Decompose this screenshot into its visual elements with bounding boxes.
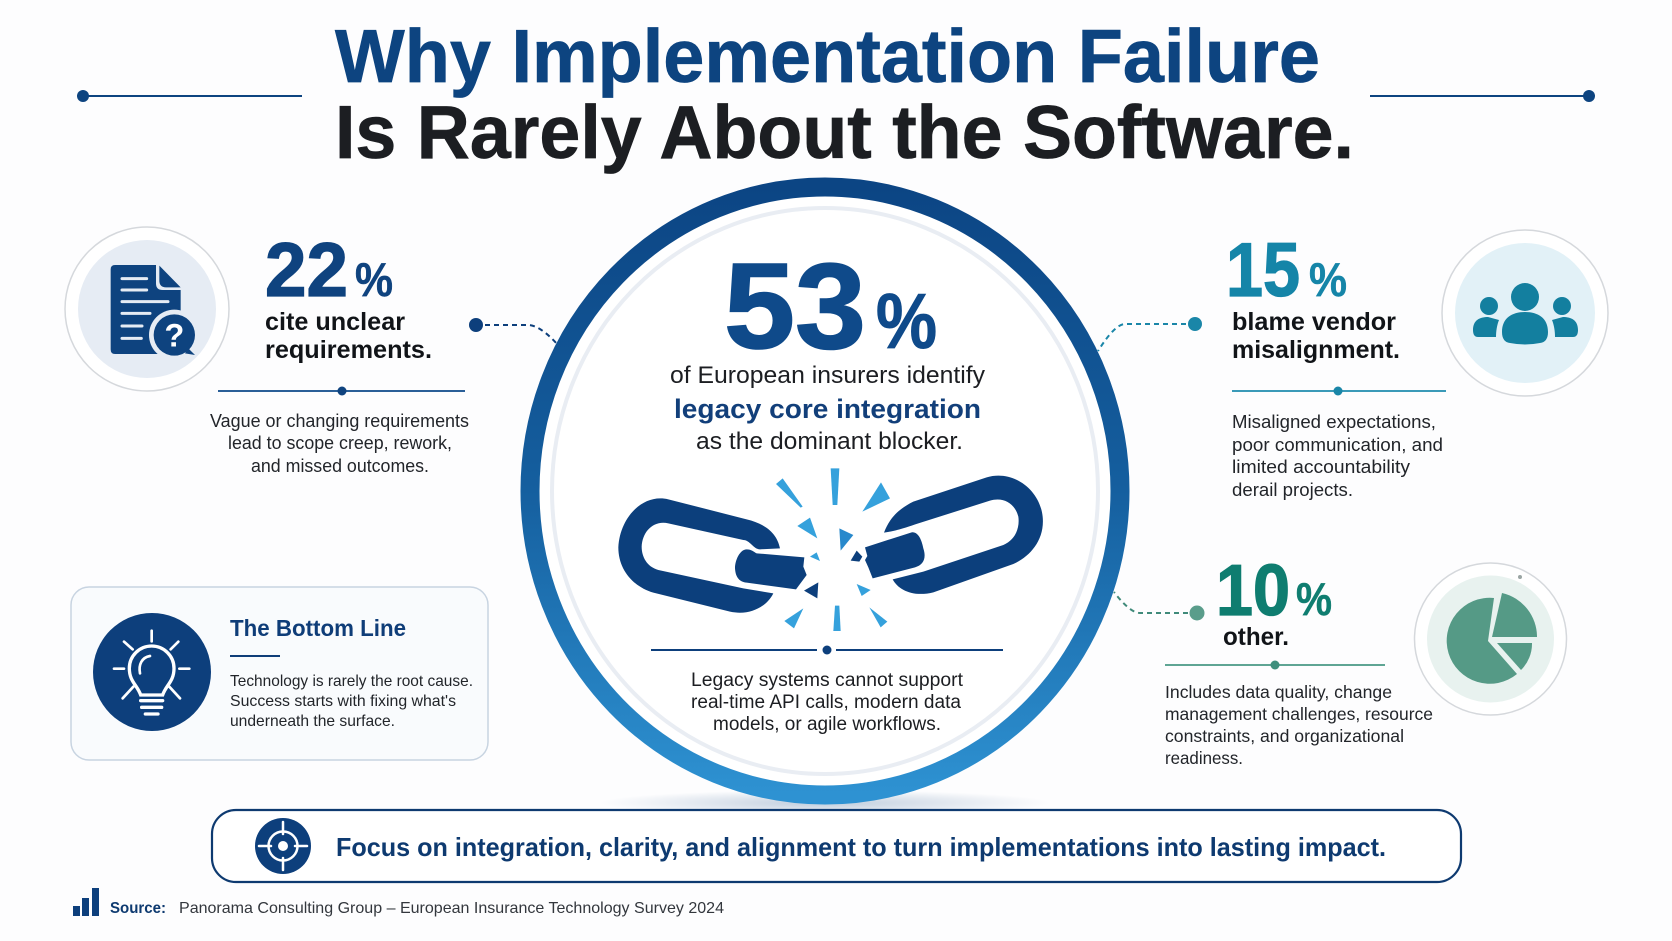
bottom line text: Success starts with fixing what's [230, 693, 456, 710]
connector: 10% [1114, 592, 1204, 620]
connector: 22% [469, 318, 558, 345]
22 percent description: lead to scope creep, rework, [228, 433, 452, 453]
15 percent label: misalignment. [1232, 336, 1400, 364]
22 percent label [265, 308, 432, 364]
icon: people group [1442, 230, 1608, 396]
15 percent figure: % [1309, 253, 1347, 306]
15 percent description: limited accountability [1232, 457, 1410, 477]
bottom line text [230, 673, 473, 730]
title [335, 14, 1354, 174]
icon: lightbulb [93, 613, 211, 731]
central statement: legacy core integration [674, 394, 981, 424]
22 percent figure [265, 228, 393, 313]
panel: 15 percent vendor misalignment [1226, 228, 1608, 500]
panel: 10 percent other [1165, 551, 1566, 768]
15 percent divider [1232, 386, 1446, 396]
icon: document with question mark: ? [164, 317, 184, 354]
banner: focus statement [212, 810, 1461, 882]
bottom line text: Technology is rarely the root cause. [230, 673, 473, 690]
panel: the bottom line [71, 587, 488, 760]
connector: 15% [1098, 317, 1202, 351]
source text: Panorama Consulting Group – European Insurance Technology Survey 2024 [179, 900, 724, 917]
22 percent figure: % [355, 253, 393, 306]
central circle panel [530, 187, 1120, 795]
22 percent divider [218, 386, 465, 396]
15 percent label [1232, 308, 1400, 364]
icon: pie chart [1414, 563, 1566, 715]
15 percent description: poor communication, and [1232, 435, 1443, 455]
53 percent figure [724, 238, 937, 374]
53 percent figure: 53 [724, 238, 866, 374]
10 percent figure [1216, 551, 1332, 631]
10 percent description [1165, 682, 1433, 768]
22 percent description: Vague or changing requirements [210, 411, 469, 431]
icon: document with question mark [65, 227, 229, 391]
central description: Legacy systems cannot support [691, 670, 964, 691]
15 percent figure: 15 [1226, 228, 1300, 313]
icon: broken chain link [618, 468, 1043, 631]
icon: target [255, 818, 311, 874]
22 percent label: cite unclear [265, 308, 405, 336]
right title rule [1370, 90, 1595, 102]
circle shadow [600, 790, 1050, 816]
10 percent description: readiness. [1165, 748, 1243, 768]
central statement [670, 362, 985, 455]
bottom line text: underneath the surface. [230, 713, 395, 730]
15 percent description: derail projects. [1232, 480, 1353, 500]
10 percent description: constraints, and organizational [1165, 726, 1404, 746]
title line 1: Why Implementation Failure [335, 14, 1320, 98]
10 percent label: other. [1223, 623, 1289, 651]
15 percent figure [1226, 228, 1347, 313]
53 percent figure: % [876, 277, 937, 365]
left title rule [77, 90, 302, 102]
10 percent description: management challenges, resource [1165, 704, 1433, 724]
central description: models, or agile workflows. [713, 714, 941, 735]
source label: Source: [110, 900, 166, 917]
banner text: Focus on integration, clarity, and alignment to turn implementations into lasting impact. [336, 832, 1386, 862]
22 percent description [210, 411, 469, 476]
central divider [651, 646, 1003, 654]
15 percent description: Misaligned expectations, [1232, 412, 1436, 432]
central description: real-time API calls, modern data [691, 692, 961, 713]
22 percent description: and missed outcomes. [251, 456, 429, 476]
10 percent divider [1165, 660, 1385, 670]
15 percent label: blame vendor [1232, 308, 1396, 336]
10 percent figure: % [1296, 573, 1332, 625]
22 percent figure: 22 [265, 228, 348, 313]
22 percent label: requirements. [265, 336, 432, 364]
title line 2: Is Rarely About the Software. [335, 90, 1354, 174]
10 percent figure: 10 [1216, 551, 1290, 631]
central statement: of European insurers identify [670, 362, 985, 389]
bottom line heading: The Bottom Line [230, 615, 406, 641]
panel: 22 percent unclear requirements [65, 227, 469, 476]
source line [73, 888, 724, 917]
10 percent description: Includes data quality, change [1165, 682, 1392, 702]
central description [691, 670, 964, 735]
icon: bar chart [73, 888, 99, 916]
central statement: as the dominant blocker. [696, 428, 963, 455]
15 percent description [1232, 412, 1443, 500]
